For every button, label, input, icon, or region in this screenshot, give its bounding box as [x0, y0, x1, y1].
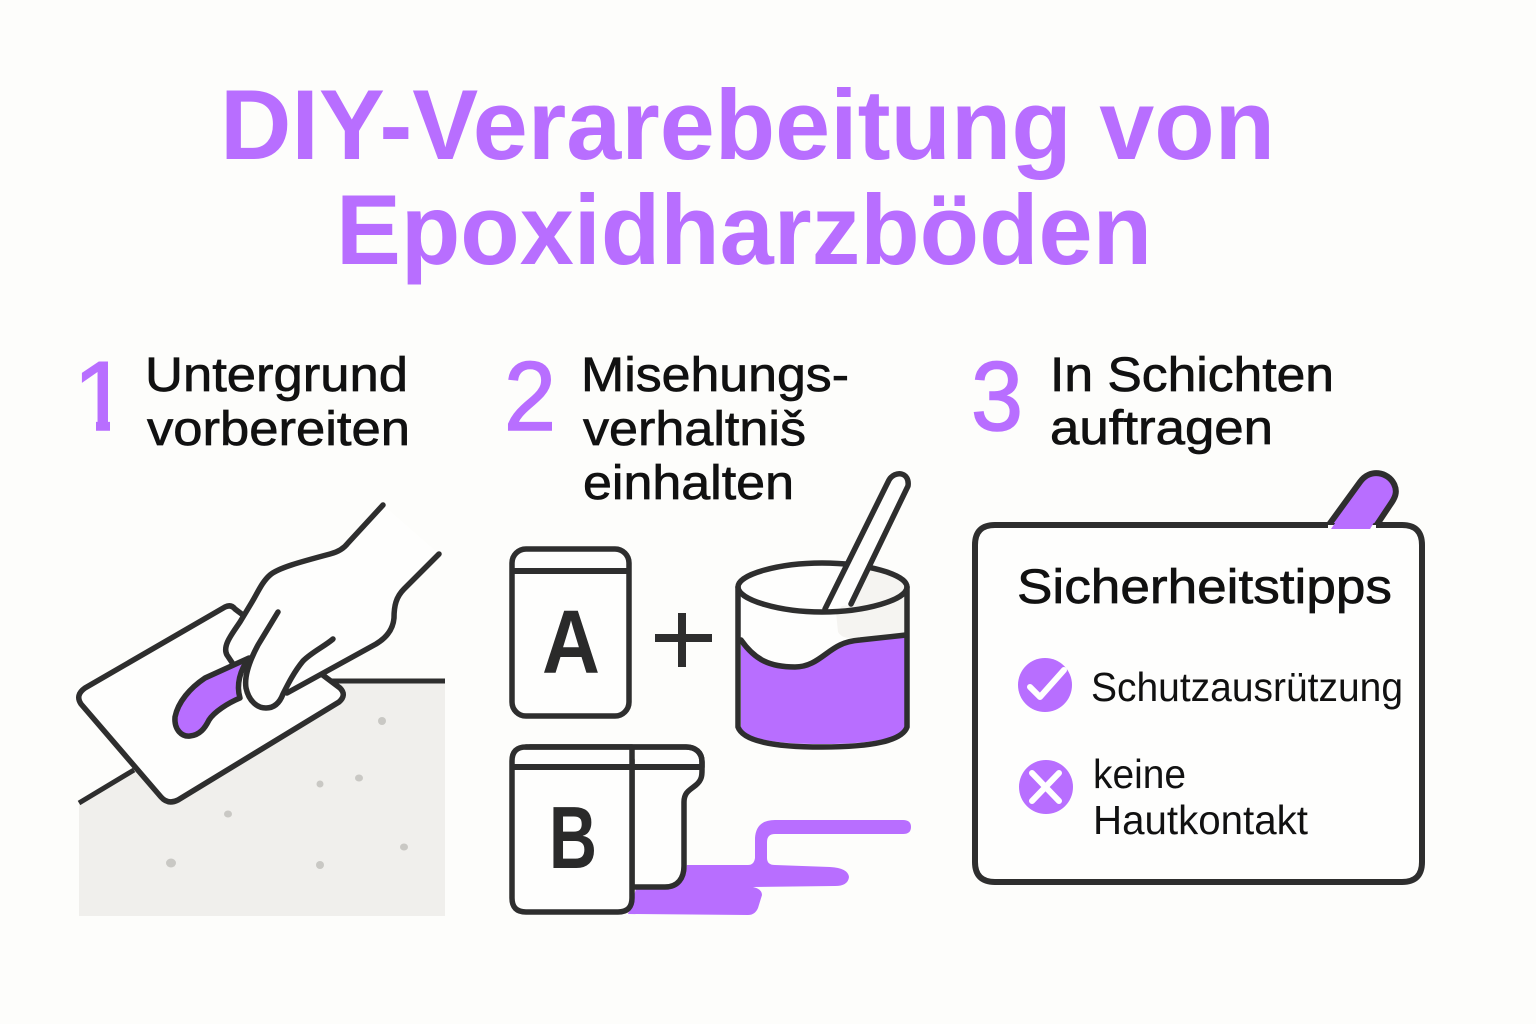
panel: safety tips	[975, 473, 1422, 882]
floor surface	[79, 682, 445, 916]
step 3 heading: In Schichten	[1050, 349, 1334, 402]
illustration: component B: B	[549, 788, 597, 887]
tip: no skin contact: keine	[1093, 751, 1186, 797]
step 3 heading	[1050, 349, 1334, 455]
epoxy spill	[628, 820, 911, 915]
panel tab	[1328, 473, 1396, 526]
title: Epoxidharzböden	[336, 174, 1152, 285]
step 1 heading: Untergrund	[145, 349, 408, 402]
bucket outline	[738, 587, 907, 747]
illustration: component A	[512, 549, 629, 716]
step 2 heading: Misehungs-	[581, 349, 849, 402]
step 3 heading: auftragen	[1050, 402, 1273, 455]
step 2 heading: verhaltniš	[583, 403, 806, 456]
step 1 heading: vorbereiten	[147, 403, 410, 456]
illustration: mixing bucket	[737, 473, 908, 747]
plus sign	[655, 613, 712, 667]
illustration: component B	[512, 747, 702, 912]
tip: no skin contact	[1093, 751, 1309, 843]
rim interior	[737, 562, 907, 612]
epoxy smear	[175, 658, 249, 736]
step 2 heading	[581, 349, 849, 510]
step 3 number: 3	[971, 341, 1023, 451]
trowel	[79, 606, 343, 802]
title: DIY-Verarebeitung von	[220, 69, 1275, 180]
panel box	[975, 525, 1422, 882]
tip: protective gear: Schutzausrützung	[1091, 664, 1403, 710]
illustration: trowel and hand on floor	[79, 505, 445, 916]
title	[220, 69, 1275, 285]
icon: check	[1018, 658, 1072, 712]
step 2 number: 2	[504, 341, 556, 451]
step 1 heading	[145, 349, 410, 456]
icon: cross	[1019, 760, 1073, 814]
panel heading: Sicherheitstipps	[1017, 561, 1392, 614]
bucket body	[738, 587, 907, 747]
floor edges	[79, 681, 445, 803]
step 1 number: 1	[73, 341, 129, 451]
tab overlap	[1331, 516, 1378, 529]
step 2 heading: einhalten	[583, 457, 794, 510]
tip: no skin contact: Hautkontakt	[1093, 797, 1309, 843]
illustration: component A: A	[542, 593, 600, 693]
liquid line	[741, 635, 906, 667]
mixed epoxy	[741, 635, 905, 744]
floor speckles	[166, 717, 408, 869]
inner shade	[836, 595, 905, 638]
stirring stick	[825, 473, 908, 608]
hand	[228, 505, 439, 708]
